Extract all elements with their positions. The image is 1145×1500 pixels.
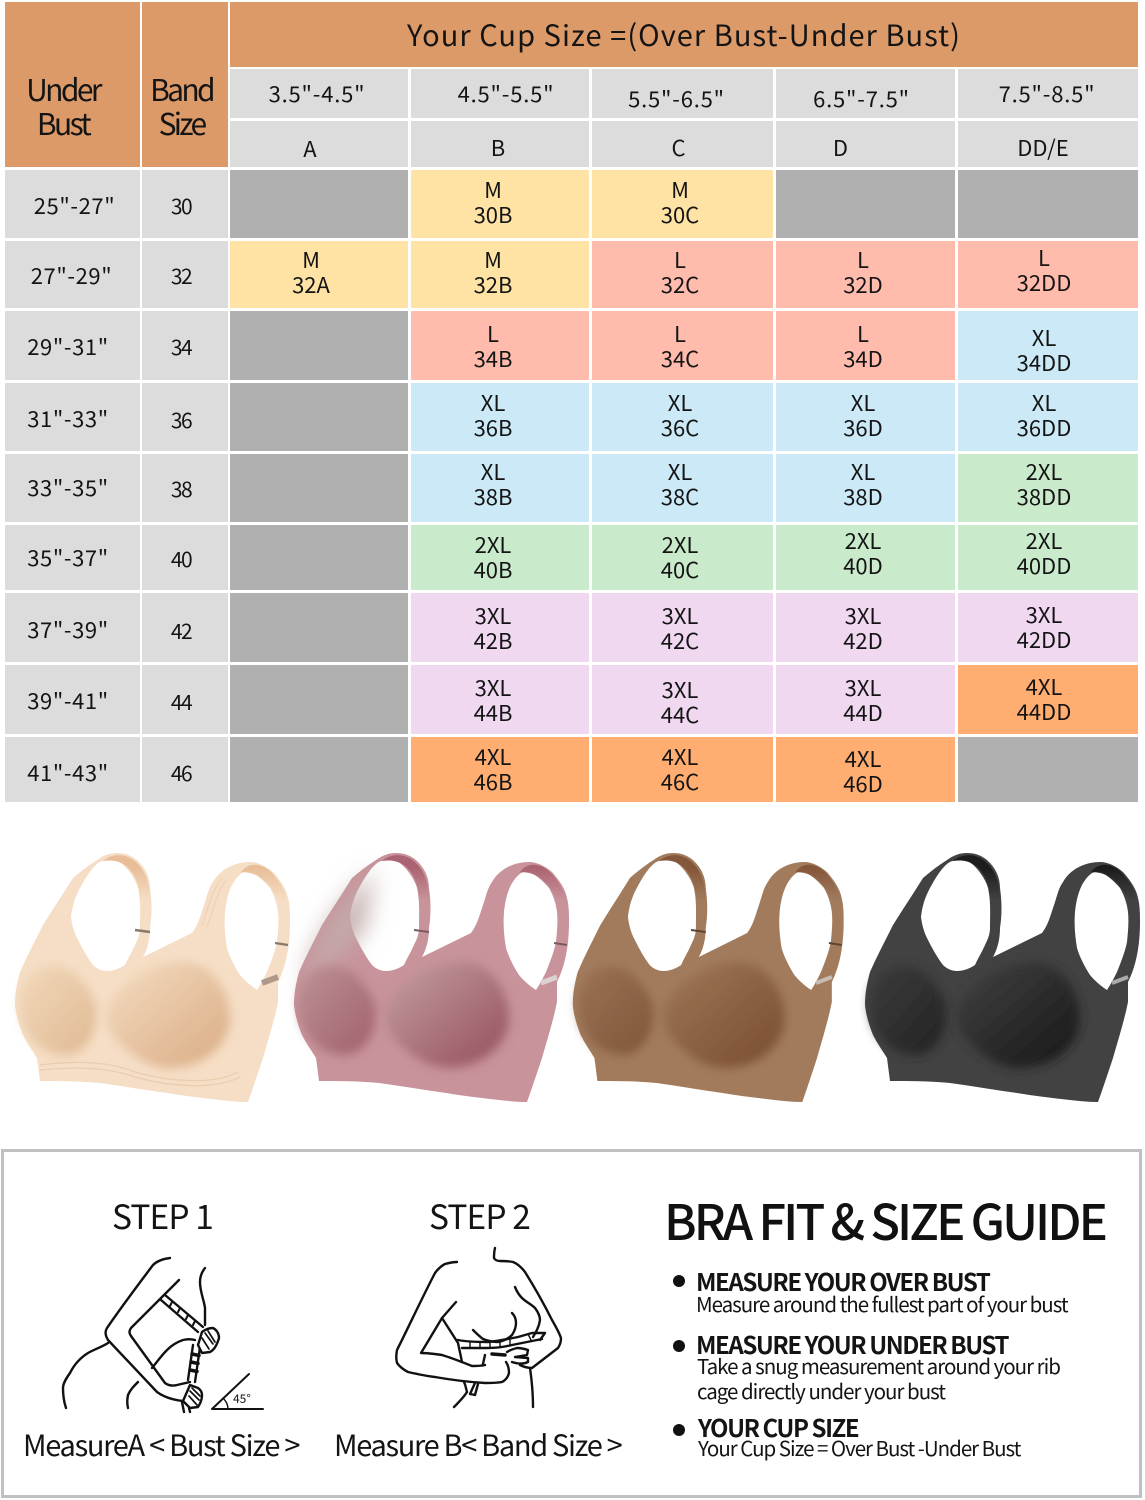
text: your cup size (698, 1409, 1021, 1462)
44B: 3XL (475, 670, 511, 702)
cup DD/E (958, 121, 1138, 167)
34B: 34B (474, 342, 512, 374)
36C: XL (668, 386, 692, 418)
range 6.5-7.5: 6.5"-7.5" (813, 82, 910, 114)
40C (592, 525, 773, 590)
42B: 42B (474, 624, 512, 656)
row 30 label: 25"-27" (34, 189, 115, 221)
32DD: 32DD (1017, 266, 1071, 298)
32C (592, 241, 773, 308)
row 46 label: 41"-43" (27, 756, 109, 788)
title: bra fit and size guide: BRA FIT & SIZE GUIDE (664, 1184, 1105, 1255)
row 44 label: 39"-41" (27, 684, 109, 716)
44A empty (230, 665, 408, 734)
body: cup size: Your Cup Size = Over Bust -Under Bust (698, 1432, 1020, 1462)
step 2 heading: STEP 2 (429, 1190, 530, 1239)
cup C: C (671, 131, 686, 163)
row 38 label: 33"-35" (27, 471, 109, 503)
row 30 band: 30 (171, 191, 191, 221)
header: under bust: Bust (37, 100, 89, 144)
angle label 45 degrees: 45° (233, 1390, 251, 1407)
row 46 band: 46 (171, 758, 191, 788)
44DD (958, 665, 1138, 734)
range 7.5-8.5 (958, 69, 1138, 118)
cup C (592, 121, 773, 167)
text: measure under bust (696, 1326, 1060, 1404)
row 46 band (142, 737, 228, 802)
34D: L (857, 316, 869, 348)
38C (592, 454, 773, 522)
30B (411, 170, 589, 238)
row 36 label (5, 383, 140, 451)
range 3.5-4.5 (230, 69, 408, 118)
row 32 label: 27"-29" (31, 259, 112, 291)
34D: 34D (843, 342, 883, 374)
heading: over bust: MEASURE YOUR OVER BUST (696, 1263, 989, 1298)
44B: 44B (474, 696, 512, 728)
icon: measuring over bust (62, 1256, 264, 1414)
bra: nude (15, 853, 290, 1102)
row 40 label: 35"-37" (27, 541, 109, 573)
34B: L (487, 316, 499, 348)
row 40 band (142, 525, 228, 590)
32D: 32D (843, 268, 883, 300)
44C: 44C (661, 698, 699, 730)
44C: 3XL (662, 672, 698, 704)
row 32 label (5, 241, 140, 308)
panel: bra fit and size guide (1, 1149, 1142, 1498)
42D: 42D (843, 624, 883, 656)
36D: XL (851, 386, 875, 418)
row 30 label (5, 170, 140, 238)
44DD: 44DD (1017, 694, 1071, 726)
44D: 44D (843, 696, 883, 728)
38C: XL (668, 454, 692, 486)
bra: black (865, 853, 1140, 1102)
cup D (776, 121, 955, 167)
header: cup size formula: Your Cup Size =(Over Bust-Under Bust) (407, 13, 961, 55)
bullet 3 (673, 1424, 685, 1436)
44C (592, 665, 773, 734)
heading: under bust: MEASURE YOUR UNDER BUST (696, 1326, 1008, 1361)
42C (592, 593, 773, 662)
32B: 32B (474, 268, 512, 300)
40D: 40D (843, 548, 883, 580)
row 40 band: 40 (171, 544, 191, 574)
row 38 band (142, 454, 228, 522)
range 6.5-7.5 (776, 69, 955, 118)
38D (776, 454, 955, 522)
body: under bust: cage directly under your bust (697, 1374, 945, 1404)
46D: 4XL (845, 742, 881, 774)
row 36 band: 36 (171, 405, 191, 435)
heading: cup size: YOUR CUP SIZE (698, 1409, 858, 1444)
cup B: B (491, 131, 505, 163)
body: under bust (697, 1350, 1060, 1404)
34C: L (674, 316, 686, 348)
cup DD/E: DD/E (1017, 131, 1069, 163)
42C: 3XL (662, 598, 698, 630)
text: measure over bust (696, 1263, 1068, 1318)
header: cup size formula (230, 2, 1138, 67)
34DD (958, 311, 1138, 380)
38C: 38C (661, 480, 699, 512)
row 42 band: 42 (171, 616, 191, 646)
range 7.5-8.5: 7.5"-8.5" (999, 77, 1095, 109)
32A: 32A (292, 268, 330, 300)
cup B (411, 121, 589, 167)
34D (776, 311, 955, 380)
32D: L (857, 242, 869, 274)
46A empty (230, 737, 408, 802)
46D: 46D (843, 767, 883, 799)
42DD (958, 593, 1138, 662)
36B: XL (481, 386, 505, 418)
row 32 band (142, 241, 228, 308)
42D: 3XL (845, 598, 881, 630)
38B: XL (481, 454, 505, 486)
row 46 label (5, 737, 140, 802)
row 34 label: 29"-31" (27, 330, 109, 362)
34C (592, 311, 773, 380)
row 40 label (5, 525, 140, 590)
row 34 band (142, 311, 228, 380)
row 44 band (142, 665, 228, 734)
36C: 36C (661, 410, 699, 442)
42C: 42C (661, 624, 699, 656)
row 38 label (5, 454, 140, 522)
cup A (230, 121, 408, 167)
38D: XL (851, 454, 875, 486)
46DD empty (958, 737, 1138, 802)
36DD: 36DD (1017, 410, 1071, 442)
36D: 36D (843, 410, 883, 442)
row 38 band: 38 (171, 474, 191, 504)
header: band size: Band (150, 66, 213, 110)
bullet 1 (673, 1275, 685, 1287)
46D (776, 737, 955, 802)
34C: 34C (661, 342, 699, 374)
row 42 band (142, 593, 228, 662)
42D (776, 593, 955, 662)
30C: M (671, 172, 689, 204)
40C: 40C (661, 552, 699, 584)
30B: M (484, 172, 502, 204)
46B: 4XL (475, 740, 511, 772)
40B (411, 525, 589, 590)
42B (411, 593, 589, 662)
46C (592, 737, 773, 802)
30A empty (230, 170, 408, 238)
40A empty (230, 525, 408, 590)
38D: 38D (843, 480, 883, 512)
row 34 band: 34 (171, 332, 191, 362)
step 1 heading: STEP 1 (112, 1190, 213, 1239)
36C (592, 383, 773, 451)
36D (776, 383, 955, 451)
34DD: 34DD (1017, 346, 1071, 378)
range 5.5-6.5: 5.5"-6.5" (628, 82, 725, 114)
36B: 36B (474, 410, 512, 442)
44D: 3XL (845, 670, 881, 702)
46B (411, 737, 589, 802)
38DD: 2XL (1026, 454, 1062, 486)
body: under bust: Take a snug measurement around your rib (697, 1350, 1060, 1380)
32C: L (674, 242, 686, 274)
product photos: four bras (14, 853, 1140, 1102)
42DD: 3XL (1026, 598, 1062, 630)
header: band size: Size (159, 100, 204, 144)
bullet 2 (673, 1340, 685, 1352)
32DD: L (1038, 240, 1050, 272)
row 42 label: 37"-39" (27, 613, 109, 645)
range 4.5-5.5: 4.5"-5.5" (458, 77, 554, 109)
32A: M (302, 242, 320, 274)
32B (411, 241, 589, 308)
38DD (958, 454, 1138, 522)
40B: 40B (474, 552, 512, 584)
icon: measuring under bust (395, 1246, 562, 1408)
34B (411, 311, 589, 380)
36DD: XL (1032, 386, 1056, 418)
cup A: A (303, 132, 317, 164)
row 42 label (5, 593, 140, 662)
range 4.5-5.5 (411, 69, 589, 118)
body: over bust: Measure around the fullest part of your bust (696, 1288, 1068, 1318)
42A empty (230, 593, 408, 662)
row 36 label: 31"-33" (27, 402, 109, 434)
32DD (958, 241, 1138, 308)
44B (411, 665, 589, 734)
46B: 46B (474, 764, 512, 796)
row 44 band: 44 (171, 687, 191, 717)
bra: rose pink (294, 853, 569, 1102)
30C: 30C (661, 198, 699, 230)
46C: 4XL (662, 740, 698, 772)
32B: M (484, 242, 502, 274)
30C (592, 170, 773, 238)
38B (411, 454, 589, 522)
size chart table (5, 2, 1138, 802)
40D: 2XL (845, 524, 881, 556)
38DD: 38DD (1017, 480, 1071, 512)
row 30 band (142, 170, 228, 238)
32A (230, 241, 408, 308)
caption: measure B: Measure B< Band Size > (334, 1423, 621, 1465)
30D empty (776, 170, 955, 238)
40DD (958, 525, 1138, 590)
42DD: 42DD (1017, 622, 1071, 654)
36A empty (230, 383, 408, 451)
34DD: XL (1032, 320, 1056, 352)
38A empty (230, 454, 408, 522)
row 32 band: 32 (171, 261, 191, 291)
44DD: 4XL (1026, 670, 1062, 702)
caption: measure A: MeasureA < Bust Size > (23, 1423, 299, 1465)
40D (776, 525, 955, 590)
range 5.5-6.5 (592, 69, 773, 118)
30B: 30B (474, 198, 512, 230)
cup D: D (833, 131, 848, 163)
range 3.5-4.5: 3.5"-4.5" (269, 77, 365, 109)
42B: 3XL (475, 598, 511, 630)
36B (411, 383, 589, 451)
40DD: 2XL (1026, 524, 1062, 556)
row 44 label (5, 665, 140, 734)
30DD empty (958, 170, 1138, 238)
36DD (958, 383, 1138, 451)
40C: 2XL (662, 528, 698, 560)
44D (776, 665, 955, 734)
46C: 46C (661, 764, 699, 796)
40DD: 40DD (1017, 548, 1071, 580)
row 36 band (142, 383, 228, 451)
header: under bust: Under (26, 66, 100, 110)
40B: 2XL (475, 528, 511, 560)
34A empty (230, 311, 408, 380)
row 34 label (5, 311, 140, 380)
32C: 32C (661, 268, 699, 300)
header: under bust (5, 2, 140, 167)
bra: brown (573, 853, 844, 1102)
32D (776, 241, 955, 308)
38B: 38B (474, 480, 512, 512)
header: band size (142, 2, 228, 167)
